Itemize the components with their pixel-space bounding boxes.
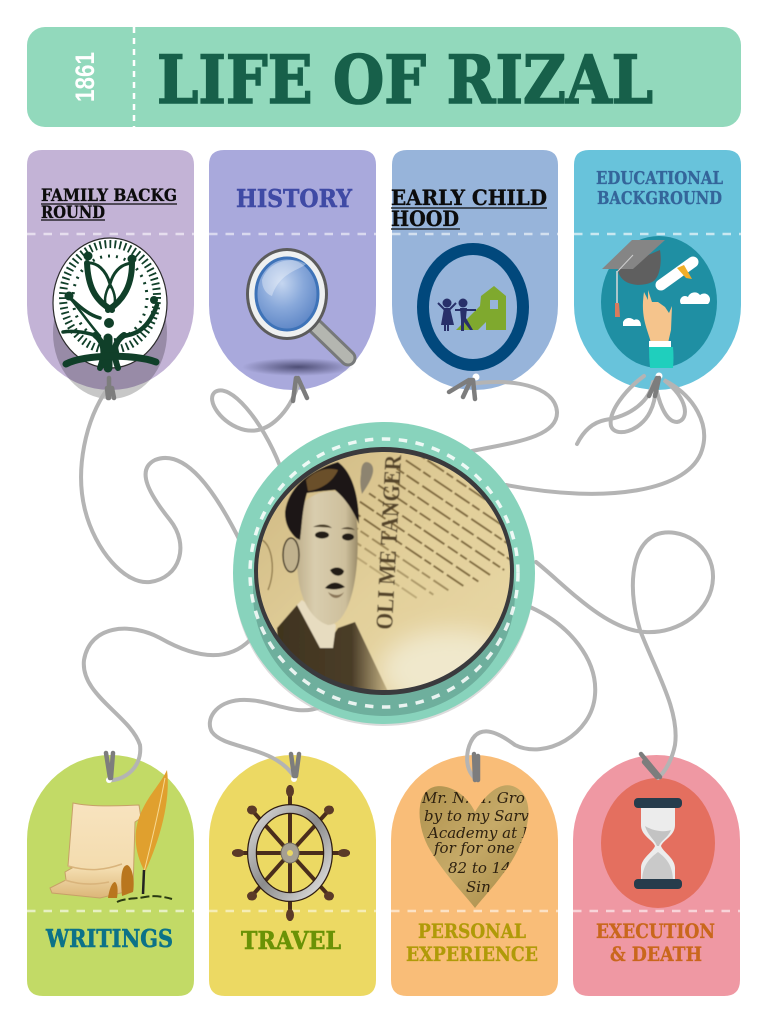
heading: family background: FAMILY BACKG: [41, 186, 177, 206]
icon: scroll and quill: [50, 770, 172, 902]
heading: early childhood: EARLY CHILD: [391, 185, 547, 210]
string: execution and death: [536, 532, 713, 778]
icon: letter heart: 82 to 14: [448, 859, 511, 877]
face: [296, 491, 358, 625]
icon: ship wheel: [232, 785, 350, 921]
icon: hourglass: [601, 778, 715, 908]
heading: personal experience: [406, 919, 538, 966]
heading: early childhood: HOOD: [391, 206, 459, 231]
tag: early childhood: [391, 150, 558, 390]
icon: letter heart: Sin: [466, 878, 491, 896]
heading: educational background: BACKGROUND: [597, 188, 722, 209]
ear: [283, 538, 299, 572]
clips holding the strings: [106, 372, 662, 783]
icon: magnifying glass: [242, 248, 354, 376]
string: personal experience: [467, 607, 595, 780]
string: history: [212, 385, 298, 466]
string: writings: [84, 629, 250, 780]
tag: personal experience: [391, 755, 558, 996]
handwritten page: [356, 457, 510, 599]
heading: writings: WRITINGS: [45, 924, 173, 953]
newspaper title: OLI ME TANGER: [372, 454, 407, 630]
string: educational background: [506, 376, 704, 494]
title banner: [27, 27, 741, 127]
heading: educational background: EDUCATIONAL: [596, 168, 723, 189]
heading: execution and death: [596, 919, 715, 966]
tag: writings: [27, 755, 194, 996]
icon: graduation: [601, 236, 717, 368]
heading: family background: ROUND: [41, 203, 105, 223]
portrait photo: [258, 452, 510, 690]
tag: educational background: [574, 150, 741, 390]
tag: travel: [209, 755, 376, 996]
icon: letter heart: by to my Sarven: [424, 807, 548, 825]
hair: [285, 462, 359, 540]
eyes, nose, mouth: [313, 524, 355, 598]
title: LIFE OF RIZAL: [157, 41, 653, 119]
heading: execution and death: EXECUTION: [596, 919, 715, 943]
tag: history: [209, 150, 376, 390]
centre medallion: [233, 422, 535, 726]
heading: travel: TRAVEL: [241, 926, 341, 955]
string: early childhood: [470, 382, 557, 451]
coat: [276, 604, 388, 690]
collar: [297, 600, 336, 648]
icon: letter heart: for for one We: [433, 839, 543, 857]
icon: children and playground: [423, 249, 523, 365]
icon: letter heart: Academy at R: [426, 824, 533, 842]
heading: early childhood: [391, 185, 547, 231]
heading: educational background: [596, 168, 723, 209]
icon: family tree: [53, 238, 167, 399]
tag: family background: [27, 150, 194, 399]
heading: history: HISTORY: [236, 184, 353, 213]
icon: letter heart: [420, 785, 528, 908]
icon: letter heart: Mr. N. H. Gro: [421, 789, 525, 807]
heading: family background: [41, 186, 177, 223]
strings connecting tags to portrait: [81, 376, 713, 780]
string: travel: [210, 700, 320, 778]
heading: personal experience: EXPERIENCE: [406, 942, 538, 966]
string: family background: [81, 388, 242, 582]
heading: personal experience: PERSONAL: [418, 919, 526, 943]
year label: 1861: [70, 52, 100, 102]
heading: execution and death: & DEATH: [610, 942, 702, 966]
tag: execution and death: [573, 755, 740, 996]
